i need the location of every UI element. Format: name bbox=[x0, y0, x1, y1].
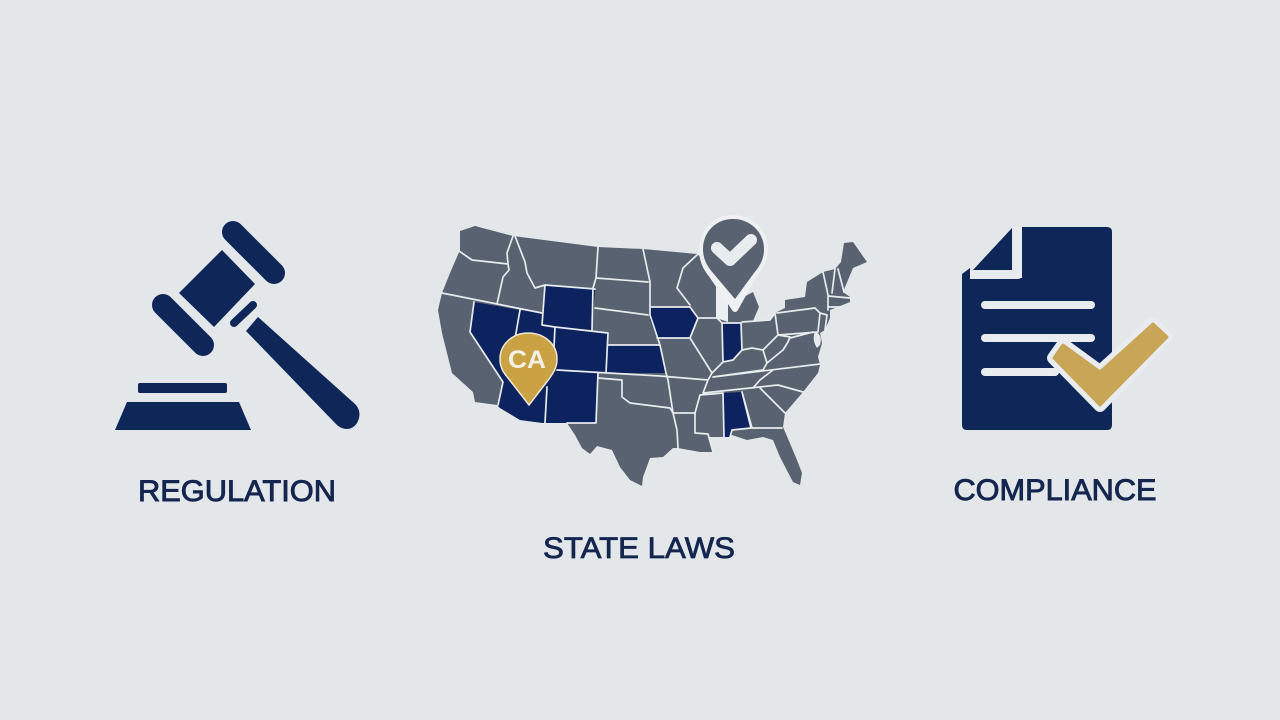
label: state laws: STATE LAWS bbox=[543, 532, 735, 565]
map silhouette bbox=[438, 226, 867, 486]
pin: California: CA bbox=[508, 346, 546, 374]
pin: California bbox=[500, 333, 557, 405]
gold check mark bbox=[1053, 323, 1167, 406]
highlighted navy states bbox=[470, 285, 751, 437]
chesapeake bay bbox=[814, 332, 821, 348]
lake gap bbox=[716, 280, 729, 322]
icon: gavel bbox=[115, 232, 359, 430]
state borders bbox=[442, 236, 850, 452]
pin: check mark bbox=[702, 218, 765, 309]
icon: compliance document bbox=[962, 227, 1167, 430]
label: regulation: REGULATION bbox=[138, 475, 336, 508]
map: United States bbox=[438, 218, 867, 486]
label: compliance: COMPLIANCE bbox=[954, 474, 1156, 507]
